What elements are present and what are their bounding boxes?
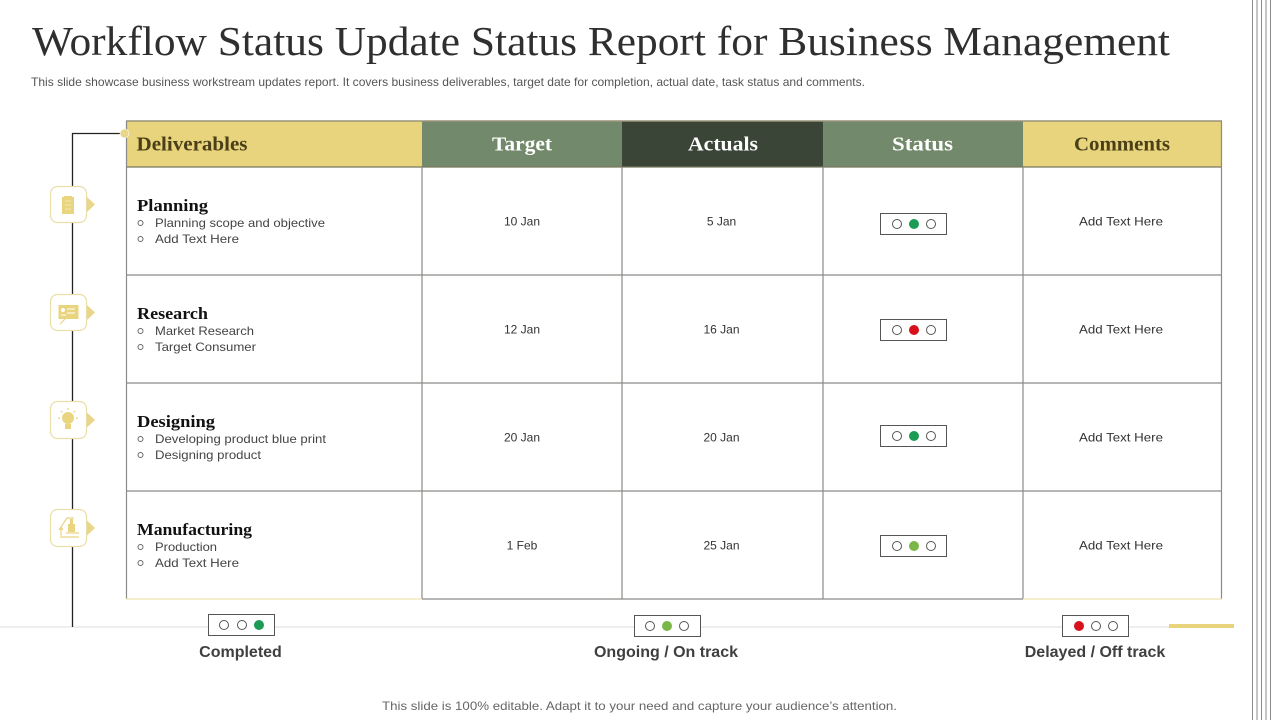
row: designing: Add Text Here bbox=[1079, 430, 1163, 444]
row: designing: Designing product bbox=[155, 448, 262, 462]
row: research bbox=[137, 304, 1163, 354]
row: planning: 5 Jan bbox=[707, 214, 736, 228]
row: designing: Developing product blue print bbox=[155, 432, 327, 446]
table grid bbox=[126, 121, 1222, 599]
row: planning: Add Text Here bbox=[1079, 214, 1163, 228]
row: manufacturing: Add Text Here bbox=[155, 556, 239, 570]
accent bar bbox=[1169, 624, 1234, 628]
row: planning: Planning bbox=[137, 196, 209, 215]
row: planning: Add Text Here bbox=[155, 232, 239, 246]
legend: delayed / off track: Delayed / Off track bbox=[1025, 644, 1165, 661]
row: planning: Planning scope and objective bbox=[155, 216, 325, 230]
row: manufacturing: Production bbox=[155, 540, 217, 554]
row: manufacturing: Manufacturing bbox=[137, 520, 253, 539]
row: manufacturing: 1 Feb bbox=[507, 538, 538, 552]
row: research: 16 Jan bbox=[703, 322, 740, 336]
subtitle: This slide showcase business workstream updates report. It covers business deliverables, target date for completion, actual date, task status and comments. bbox=[31, 75, 865, 89]
row: planning bbox=[137, 196, 1163, 246]
row: research: Target Consumer bbox=[155, 340, 256, 354]
row: manufacturing bbox=[137, 520, 1163, 570]
title: Workflow Status Update Status Report for Business Management bbox=[32, 18, 1171, 64]
icon: manufacturing robot arm bbox=[50, 510, 95, 546]
row: planning: 10 Jan bbox=[504, 214, 540, 228]
row: designing bbox=[137, 412, 1163, 462]
row: designing: 20 Jan bbox=[703, 430, 740, 444]
table header row: Target bbox=[492, 134, 552, 156]
legend: delayed / off track bbox=[1025, 616, 1165, 661]
row: research: Market Research bbox=[155, 324, 254, 338]
row: manufacturing: Add Text Here bbox=[1079, 538, 1163, 552]
table header row: Actuals bbox=[688, 134, 758, 156]
legend: ongoing / on track bbox=[594, 616, 738, 661]
table header row: Deliverables bbox=[136, 134, 248, 156]
legend: ongoing / on track: Ongoing / On track bbox=[594, 644, 738, 661]
legend: completed bbox=[199, 614, 282, 661]
table header row: Comments bbox=[1074, 134, 1170, 156]
row: designing: 20 Jan bbox=[504, 430, 540, 444]
icon: planning clipboard bbox=[50, 186, 95, 222]
table: deliverables status bbox=[126, 121, 1222, 599]
table header row bbox=[126, 121, 1222, 167]
table header row: Status bbox=[892, 134, 953, 156]
icon: designing light bulb bbox=[50, 402, 95, 438]
icon: research presentation bbox=[50, 294, 95, 330]
footer note: This slide is 100% editable. Adapt it to your need and capture your audience’s attention. bbox=[382, 699, 897, 713]
row: manufacturing: 25 Jan bbox=[703, 538, 740, 552]
row: research: 12 Jan bbox=[504, 322, 540, 336]
row: research: Add Text Here bbox=[1079, 322, 1163, 336]
row: research: Research bbox=[137, 304, 208, 323]
timeline connector bbox=[72, 129, 129, 627]
legend: completed: Completed bbox=[199, 644, 282, 661]
row: designing: Designing bbox=[137, 412, 216, 431]
